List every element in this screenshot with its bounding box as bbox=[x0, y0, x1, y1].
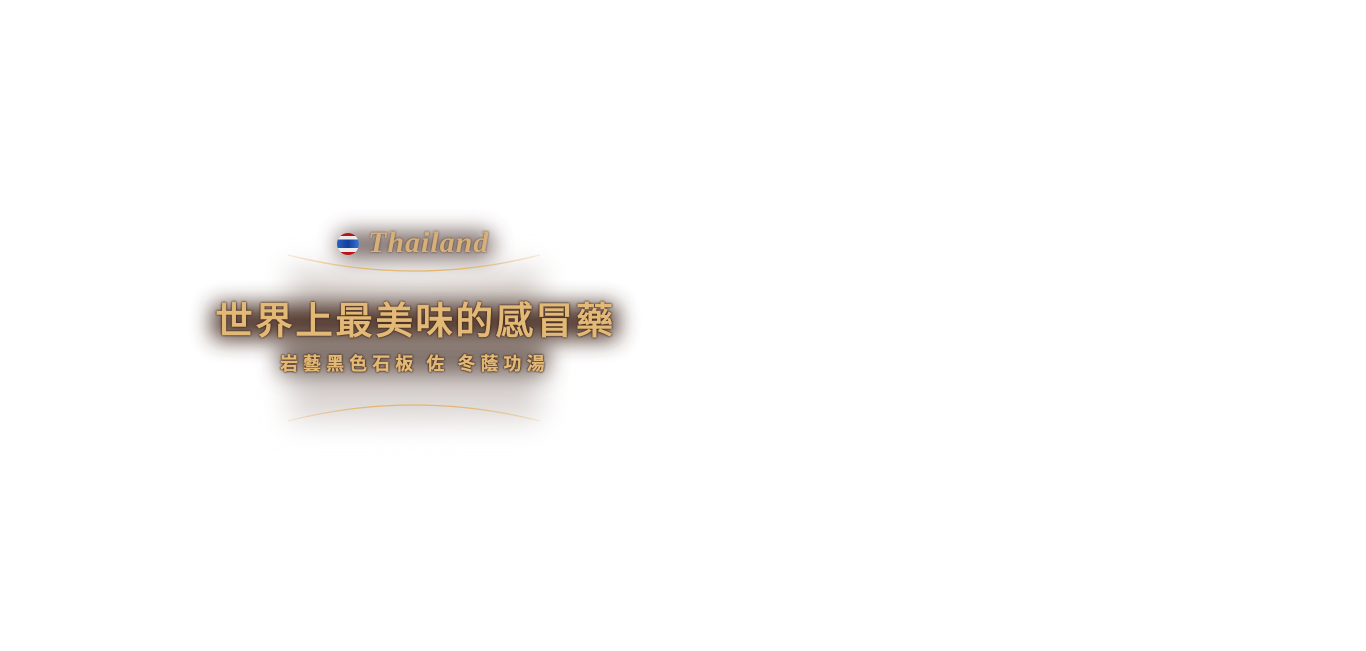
soft haze behind the whole title block bbox=[290, 268, 540, 421]
dark glow behind subtitle bbox=[278, 342, 548, 374]
bottom curved line bbox=[288, 405, 540, 421]
icon: Thailand flag bbox=[337, 233, 359, 255]
top curved line bbox=[288, 255, 540, 271]
dark glow behind country name bbox=[338, 232, 493, 258]
country name: Thailand bbox=[368, 226, 489, 259]
dark glow behind title bbox=[212, 304, 618, 340]
subtitle: 岩藝黑色石板 佐 冬蔭功湯 bbox=[280, 354, 550, 374]
main title: 世界上最美味的感冒藥 bbox=[215, 301, 616, 343]
